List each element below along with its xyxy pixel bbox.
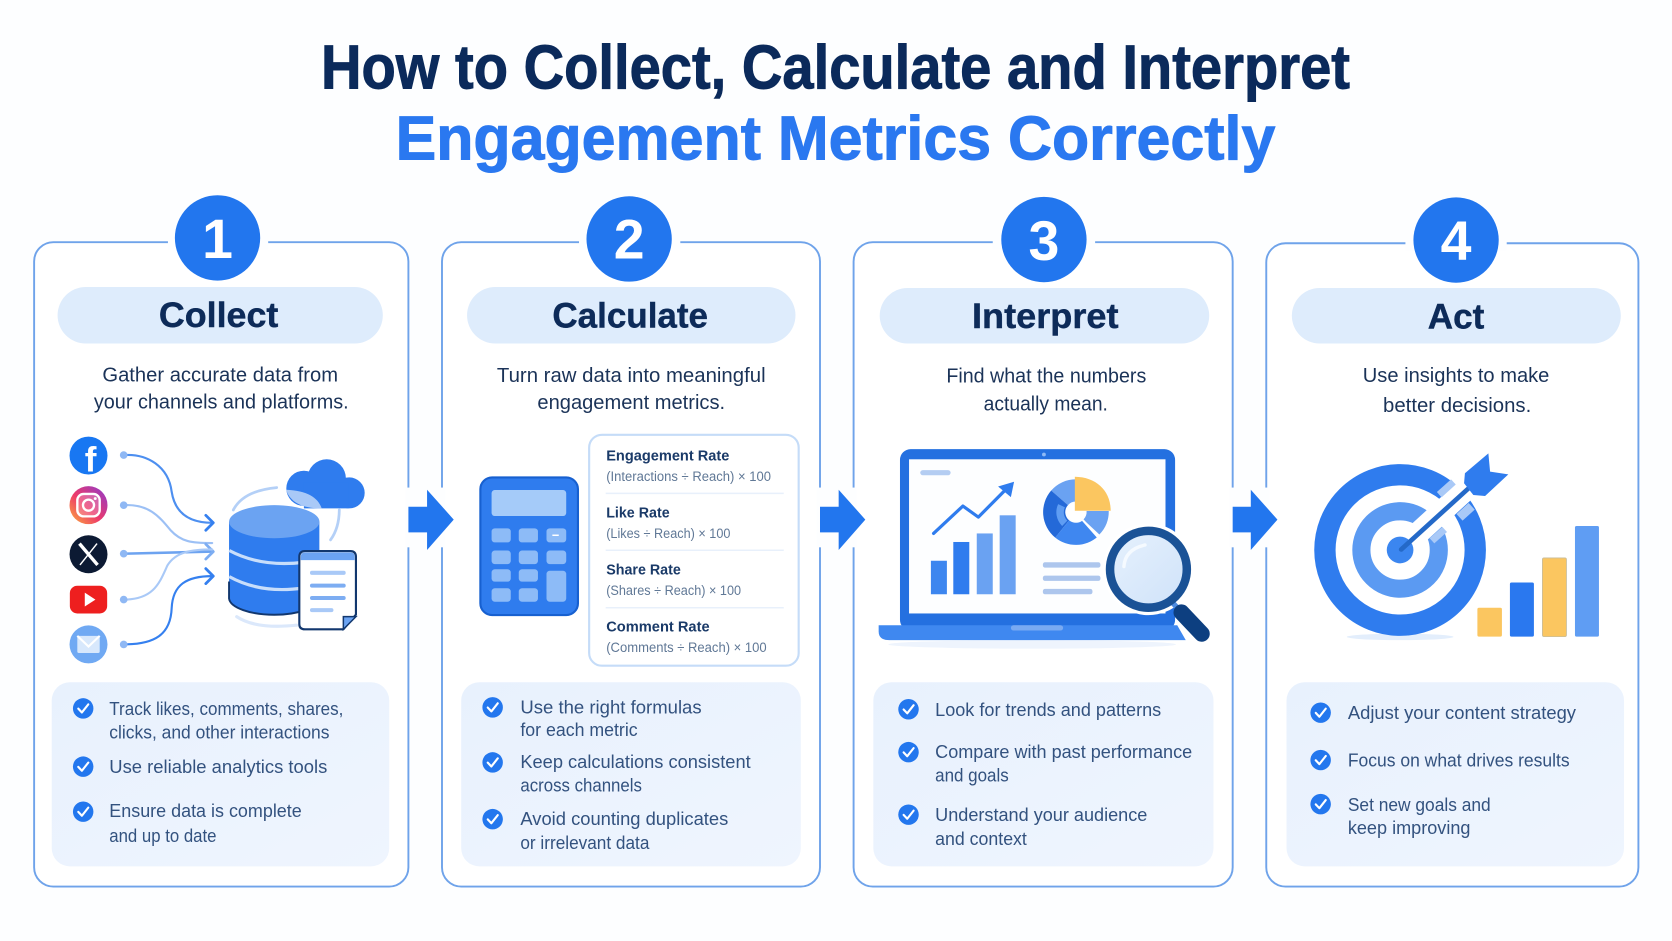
checklist panel: [52, 682, 389, 866]
formula: share rate: Share Rate: [606, 562, 681, 579]
step number 1: [175, 195, 260, 281]
panel: act: [1266, 197, 1638, 887]
text lines: [1043, 562, 1100, 594]
description: [94, 364, 349, 414]
formula card: [589, 435, 799, 666]
check item 2: [482, 751, 751, 796]
arrow: calculate to interpret: [817, 488, 865, 550]
check item 3: [1310, 794, 1491, 838]
trend line arrow: [934, 482, 1014, 533]
pill heading: Act: Act: [1428, 298, 1485, 337]
panel: collect: [34, 195, 408, 887]
icon: target with arrow: [1325, 453, 1508, 640]
description: engagement metrics.: [537, 392, 725, 414]
description: [1363, 365, 1549, 417]
step number 4: [1413, 197, 1499, 283]
formula: engagement rate: (Interactions ÷ Reach) × 100: [606, 468, 771, 484]
step number 4: 4: [1441, 210, 1472, 272]
description: [497, 365, 766, 414]
check item 3: [482, 808, 728, 853]
description: Find what the numbers: [946, 366, 1146, 388]
icon: email: [70, 625, 107, 663]
check item 2: Keep calculations consistent: [520, 751, 751, 772]
icon: youtube: [70, 586, 107, 613]
description: Gather accurate data from: [102, 364, 338, 386]
formula: engagement rate: Engagement Rate: [606, 448, 729, 465]
checklist panel: [1287, 682, 1624, 866]
title: Engagement Metrics Correctly: [396, 104, 1276, 174]
formula: like rate: (Likes ÷ Reach) × 100: [606, 525, 731, 541]
check item 3: keep improving: [1348, 817, 1470, 838]
check item 1: [73, 698, 343, 742]
checklist panel: [873, 682, 1213, 866]
check item 1: Adjust your content strategy: [1348, 702, 1577, 723]
check item 1: Track likes, comments, shares,: [109, 698, 343, 719]
check item 2: Use reliable analytics tools: [109, 756, 327, 777]
step number 2: 2: [614, 209, 645, 271]
check item 2: across channels: [520, 775, 642, 796]
description: actually mean.: [984, 394, 1108, 416]
arrow: collect to calculate: [405, 488, 454, 550]
formula: engagement rate: [606, 448, 771, 484]
bar chart: [1477, 526, 1599, 637]
icon: facebook: f: [85, 441, 97, 480]
description: Use insights to make: [1363, 365, 1549, 387]
formula: comment rate: [606, 619, 767, 655]
check item 1: Use the right formulas: [520, 696, 702, 717]
icon: X: [70, 535, 107, 573]
check item 3: [898, 804, 1147, 849]
description: Turn raw data into meaningful: [497, 365, 766, 387]
check item 1: Look for trends and patterns: [935, 699, 1161, 720]
pill heading: Calculate: Calculate: [552, 297, 708, 336]
checklist panel: [461, 682, 801, 866]
check item 3: Set new goals and: [1348, 794, 1491, 815]
formula: like rate: Like Rate: [606, 505, 670, 522]
check item 3: Understand your audience: [935, 804, 1147, 825]
pill heading: Collect: Collect: [159, 296, 279, 335]
check item 3: [73, 800, 302, 846]
icon: magnifier: [1103, 523, 1202, 634]
step number 3: 3: [1029, 210, 1059, 272]
pill heading: Interpret: Interpret: [972, 297, 1119, 336]
panel: interpret: [854, 197, 1233, 887]
icon: facebook: [70, 437, 107, 480]
illustration: laptop dashboard with magnifier: [879, 449, 1202, 649]
check item 2: Compare with past performance: [935, 741, 1192, 762]
pill heading: Collect: [58, 287, 383, 344]
formula: share rate: (Shares ÷ Reach) × 100: [606, 582, 741, 598]
check item 2: and goals: [935, 765, 1009, 786]
formula: comment rate: Comment Rate: [606, 619, 710, 636]
description: [946, 366, 1146, 416]
check item 3: Ensure data is complete: [109, 800, 302, 821]
panel: calculate: [442, 196, 820, 887]
check item 1: [482, 696, 702, 740]
step number 3: [1001, 197, 1087, 282]
icon: instagram: [70, 486, 107, 524]
formula: share rate: [606, 562, 741, 598]
icon: calculator: [480, 477, 578, 615]
illustration: database, cloud and document: [229, 459, 365, 629]
check item 3: Avoid counting duplicates: [520, 808, 728, 829]
check item 3: or irrelevant data: [520, 832, 650, 853]
pill heading: Act: [1292, 288, 1621, 344]
bar chart: [931, 515, 1016, 594]
title: [321, 34, 1350, 174]
title: How to Collect, Calculate and Interpret: [321, 34, 1350, 103]
pill heading: Interpret: [880, 288, 1209, 344]
flow arrows into database: [120, 451, 213, 648]
description: better decisions.: [1383, 395, 1531, 417]
check item 1: clicks, and other interactions: [109, 721, 329, 742]
formula: comment rate: (Comments ÷ Reach) × 100: [606, 639, 767, 655]
arrow: interpret to act: [1229, 488, 1277, 550]
check item 2: [898, 741, 1192, 786]
formula: like rate: [606, 505, 731, 541]
check item 3: and context: [935, 828, 1028, 849]
description: your channels and platforms.: [94, 392, 349, 414]
pill heading: Calculate: [467, 287, 795, 344]
check item 3: and up to date: [109, 825, 216, 846]
check item 2: Focus on what drives results: [1348, 750, 1570, 771]
check item 1: for each metric: [520, 719, 638, 740]
donut chart: [1043, 477, 1111, 545]
step number 2: [586, 196, 672, 282]
step number 1: 1: [202, 208, 233, 270]
